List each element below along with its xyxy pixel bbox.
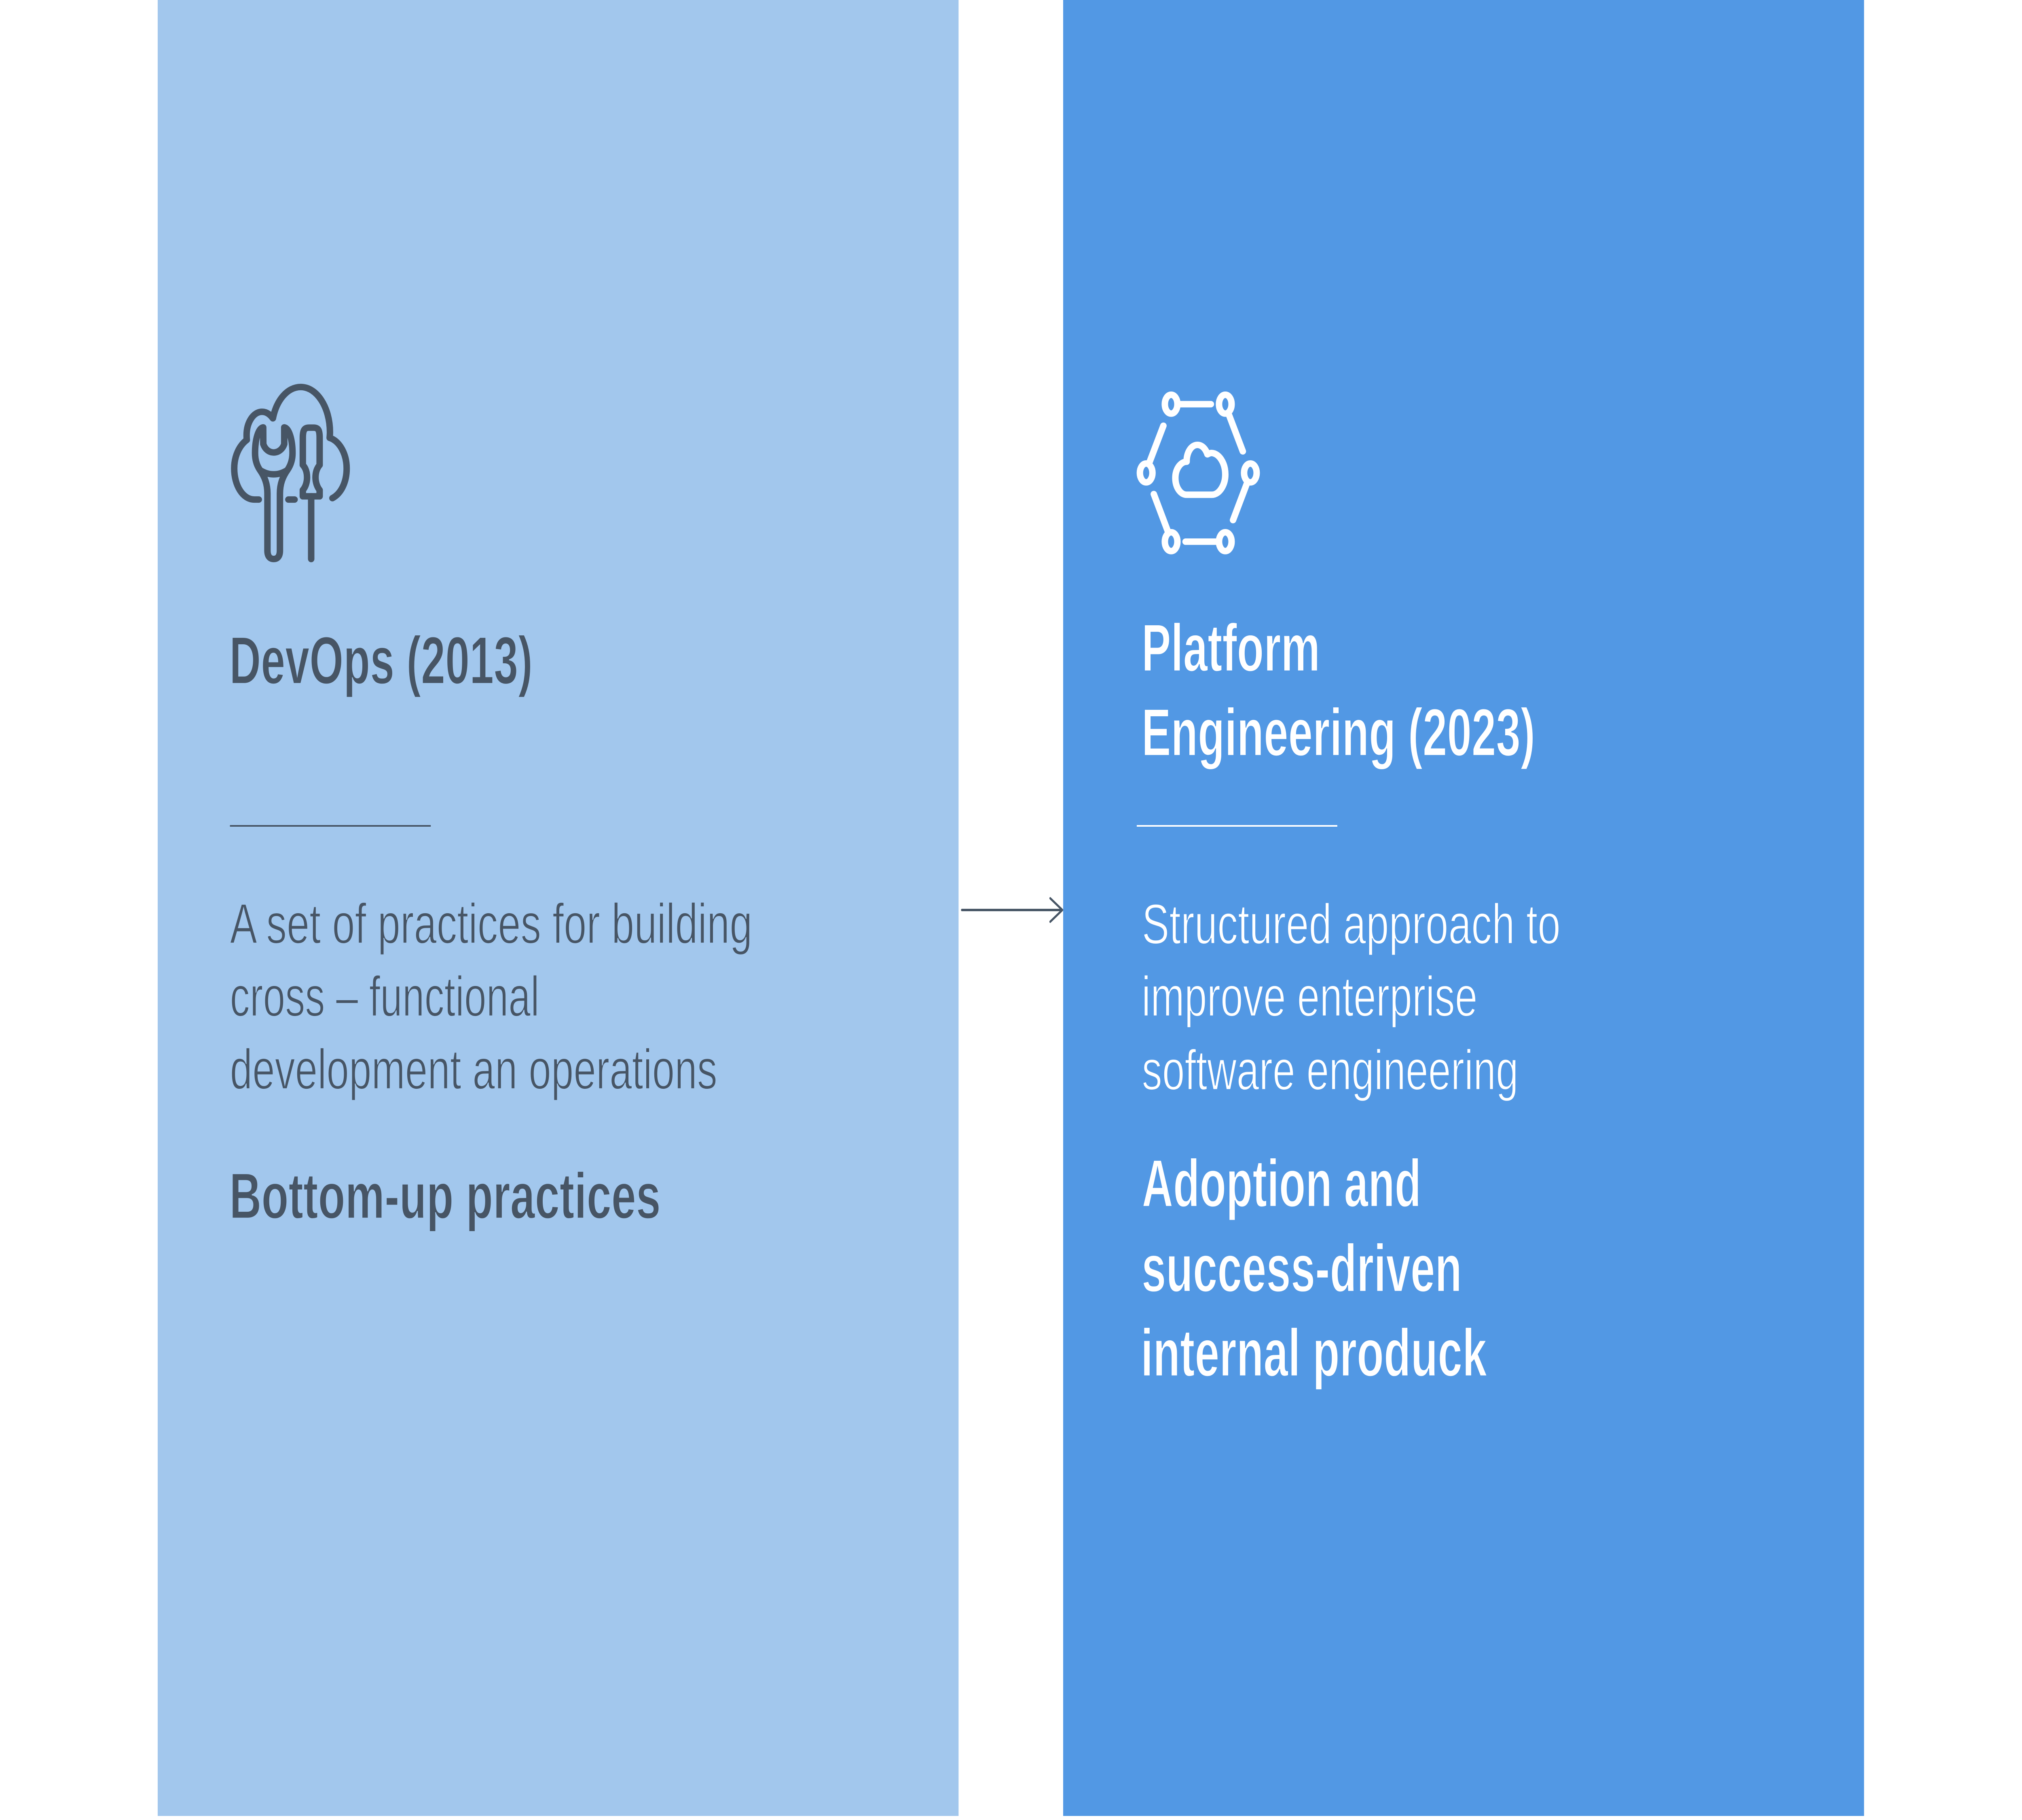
text: Platform Engineering description bbox=[1142, 893, 1561, 1102]
text: DevOps description: A set of practices for building bbox=[230, 892, 752, 956]
text: Platform Engineering description: software engineering bbox=[1142, 1039, 1519, 1102]
callout: Adoption and success-driven internal produck: success-driven bbox=[1142, 1230, 1462, 1306]
heading: Platform Engineering (2023): Platform bbox=[1142, 610, 1320, 685]
icon: cloud with wrench and screwdriver bbox=[234, 387, 347, 559]
icon: hexagon network with cloud bbox=[1140, 395, 1256, 551]
text: Platform Engineering description: improve enterprise bbox=[1142, 965, 1478, 1029]
heading: Platform Engineering (2023) bbox=[1142, 610, 1535, 770]
heading: DevOps (2013): DevOps (2013) bbox=[229, 622, 533, 698]
callout: Bottom-up practices: Bottom-up practices bbox=[229, 1160, 661, 1232]
text: Platform Engineering description: Structured approach to bbox=[1142, 893, 1561, 956]
text: DevOps description bbox=[230, 892, 752, 1101]
panel: DevOps bbox=[158, 0, 958, 1816]
callout: Adoption and success-driven internal produck: Adoption and bbox=[1142, 1145, 1421, 1221]
callout: Adoption and success-driven internal produck bbox=[1141, 1145, 1487, 1390]
arrow bbox=[962, 898, 1062, 922]
text: DevOps description: cross – functional bbox=[230, 965, 539, 1029]
heading: Platform Engineering (2023): Engineering (2023) bbox=[1142, 694, 1535, 770]
callout: Adoption and success-driven internal produck: internal produck bbox=[1141, 1315, 1487, 1390]
text: DevOps description: development an operations bbox=[230, 1038, 717, 1101]
panel: Platform Engineering bbox=[1063, 0, 1864, 1816]
